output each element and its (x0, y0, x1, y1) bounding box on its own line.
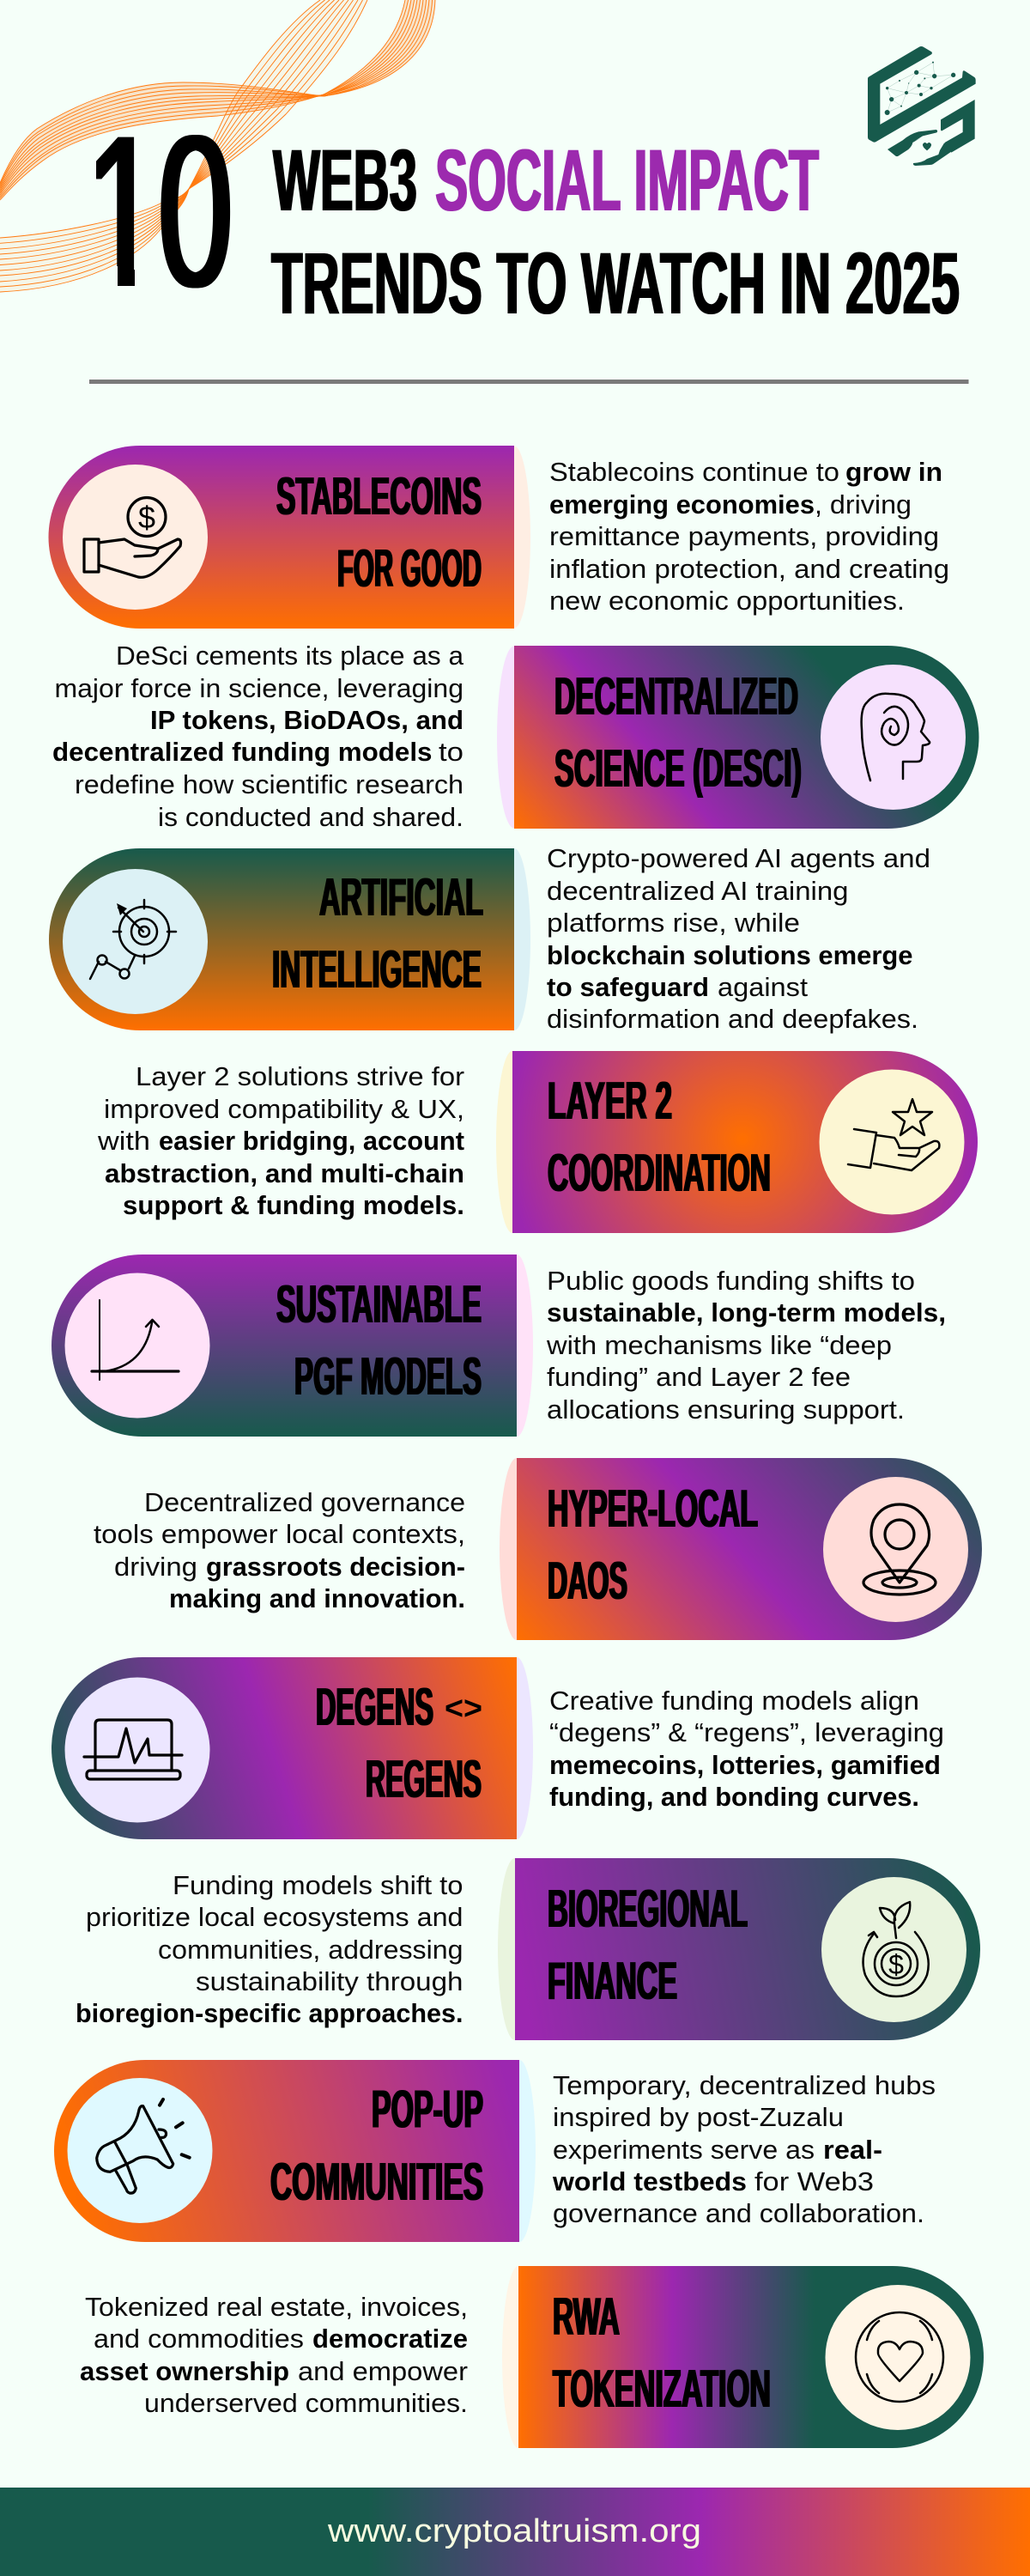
heading (548, 1479, 758, 1611)
text: decentralized science: major force in science, leveraging (55, 673, 464, 703)
text: pop-up communities: real- (823, 2135, 882, 2165)
big number 10: 1 (86, 91, 161, 332)
text: decentralized science: to (439, 737, 464, 767)
text: layer 2: improved compatibility & UX, (104, 1094, 464, 1124)
big number 10: 0 (158, 91, 233, 332)
heading: COMMUNITIES (270, 2153, 483, 2212)
text: bioregional finance: bioregion-specific approaches. (76, 1998, 464, 2028)
text: pop-up communities: Temporary, decentralized hubs (553, 2070, 936, 2100)
text: stablecoins: inflation protection, and creating (549, 554, 949, 584)
text: pop-up communities: inspired by post-Zuzalu (553, 2102, 844, 2132)
heading (276, 467, 482, 598)
heading (270, 2080, 483, 2212)
heading: REGENS (366, 1750, 482, 1809)
text: layer 2: abstraction, and multi-chain (105, 1158, 464, 1188)
text: decentralized science: is conducted and shared. (158, 802, 464, 832)
heading: SUSTAINABLE (276, 1275, 482, 1334)
text: decentralized science: DeSci cements its place as a (116, 641, 464, 671)
text: stablecoins: emerging economies (549, 489, 815, 519)
text: bioregional finance: sustainability through (196, 1966, 464, 1996)
text: rwa tokenization (80, 2292, 468, 2418)
heading: POP-UP (372, 2080, 483, 2140)
text: bioregional finance: Funding models shift to (173, 1870, 464, 1900)
icon: hand holding coin: $ (138, 500, 155, 535)
text: sustainable pgf (546, 1266, 946, 1425)
text: artificial intelligence: platforms rise, while (547, 908, 800, 938)
heading (276, 1275, 482, 1406)
icon: plant and coin: $ (888, 1949, 904, 1980)
text: hyper-local daos: driving (114, 1552, 197, 1582)
text: artificial intelligence: disinformation and deepfakes. (547, 1004, 918, 1034)
text: rwa tokenization: and empower (298, 2356, 468, 2386)
text: hyper-local daos: Decentralized governance (144, 1487, 465, 1517)
heading: LAYER 2 (548, 1072, 672, 1131)
text: sustainable pgf: Public goods funding shifts to (547, 1266, 915, 1296)
heading (548, 1072, 771, 1203)
text: artificial intelligence: against (718, 972, 808, 1002)
heading: DEGENS (316, 1678, 433, 1737)
text: hyper-local daos (94, 1487, 465, 1613)
panel: pop-up communities (54, 2060, 536, 2242)
panel: layer 2 coordination (496, 1051, 978, 1233)
panel: degens regens (52, 1657, 533, 1839)
text: sustainable pgf: funding” and Layer 2 fee (547, 1362, 851, 1392)
heading: INTELLIGENCE (272, 940, 482, 999)
text: pop-up communities: for Web3 (754, 2166, 874, 2196)
icon: growth chart (65, 1273, 209, 1419)
text: degens regens: funding, and bonding curves. (549, 1782, 919, 1812)
heading: BIOREGIONAL (548, 1880, 748, 1939)
text: stablecoins: Stablecoins continue to (549, 457, 839, 487)
text: degens regens: memecoins, lotteries, gamified (549, 1750, 941, 1780)
text: stablecoins: new economic opportunities. (549, 586, 905, 616)
icon: plant and coin (821, 1877, 966, 2022)
text: pop-up communities: governance and collaboration. (553, 2198, 924, 2228)
text: degens regens: Creative funding models align (549, 1686, 919, 1716)
panel: decentralized science (497, 646, 978, 829)
panel: sustainable pgf models (52, 1255, 533, 1437)
heading line one (273, 131, 819, 229)
panel: stablecoins for good (49, 446, 530, 629)
text: artificial intelligence (547, 843, 930, 1034)
text: sustainable pgf: sustainable, long-term models, (547, 1297, 946, 1327)
icon: target with arrow (63, 869, 208, 1014)
icon: map pin (823, 1477, 968, 1622)
text: layer 2 (97, 1061, 464, 1220)
text: layer 2: easier bridging, account (159, 1126, 464, 1156)
text: rwa tokenization: and commodities (94, 2324, 304, 2354)
heading (554, 667, 802, 799)
heading (548, 1880, 748, 2011)
text: pop-up communities: experiments serve as (553, 2135, 815, 2165)
icon: megaphone (67, 2078, 213, 2223)
icon: head with spiral (821, 665, 966, 810)
text: layer 2: support & funding models. (123, 1190, 464, 1220)
text: rwa tokenization: Tokenized real estate, invoices, (85, 2292, 468, 2322)
text: pop-up communities (552, 2070, 936, 2228)
heading: <> (445, 1691, 482, 1727)
text: artificial intelligence: Crypto-powered AI agents and (547, 843, 930, 873)
footer url: www.cryptoaltruism.org (327, 2513, 701, 2549)
heading (553, 2287, 771, 2419)
text: rwa tokenization: democratize (312, 2324, 468, 2354)
text: hyper-local daos: grassroots decision- (206, 1552, 465, 1582)
panel: bioregional finance (498, 1858, 980, 2040)
text: degens regens (549, 1686, 944, 1812)
text: layer 2: Layer 2 solutions strive for (136, 1061, 464, 1091)
heading: STABLECOINS (276, 467, 482, 526)
icon: coin with heart (826, 2285, 970, 2430)
panel: artificial intelligence (49, 848, 530, 1030)
text: bioregional finance (76, 1870, 464, 2028)
text: decentralized science: decentralized funding models (52, 737, 433, 767)
text: stablecoins: grow in (845, 457, 942, 487)
panel: hyper-local daos (500, 1458, 982, 1640)
text: stablecoins (549, 457, 949, 616)
text: degens regens: “degens” & “regens”, leveraging (549, 1717, 944, 1747)
text: artificial intelligence: decentralized AI training (547, 876, 848, 906)
text: layer 2: with (97, 1126, 150, 1156)
text: decentralized science: redefine how scientific research (75, 769, 464, 799)
text: bioregional finance: prioritize local ecosystems and (86, 1902, 464, 1932)
text: sustainable pgf: with mechanisms like “deep (546, 1330, 892, 1360)
heading (272, 868, 483, 999)
icon: laptop with pulse (65, 1678, 209, 1822)
heading: TOKENIZATION (553, 2360, 771, 2419)
text: stablecoins: , driving (815, 489, 912, 519)
text: decentralized science (52, 641, 464, 832)
heading: ARTIFICIAL (319, 868, 483, 927)
text: decentralized science: IP tokens, BioDAOs, and (150, 705, 464, 735)
footer bar (0, 2488, 1030, 2576)
text: pop-up communities: world testbeds (552, 2166, 747, 2196)
heading (316, 1678, 482, 1809)
text: artificial intelligence: blockchain solutions emerge (547, 940, 913, 970)
heading: RWA (553, 2287, 620, 2347)
icon: hand with star (819, 1070, 965, 1214)
text: hyper-local daos: making and innovation. (169, 1583, 465, 1613)
heading: DECENTRALIZED (554, 667, 798, 726)
panel: rwa tokenization (502, 2266, 984, 2448)
icon: hand holding coin (63, 465, 208, 610)
logo (868, 46, 976, 166)
text: artificial intelligence: to safeguard (547, 972, 709, 1002)
heading: FINANCE (548, 1952, 677, 2011)
text: sustainable pgf: allocations ensuring support. (547, 1394, 905, 1425)
text: rwa tokenization: asset ownership (80, 2356, 289, 2386)
title (96, 135, 960, 314)
text: bioregional finance: communities, addressing (158, 1935, 464, 1965)
heading: PGF MODELS (294, 1347, 482, 1406)
heading: HYPER-LOCAL (548, 1479, 758, 1539)
orange line ribbon decoration (0, 0, 435, 292)
heading: SCIENCE (DESCI) (554, 739, 802, 799)
text: hyper-local daos: tools empower local contexts, (94, 1519, 465, 1549)
big number 10 (96, 135, 230, 289)
text: stablecoins: remittance payments, providing (549, 521, 939, 551)
divider (89, 380, 968, 384)
text: rwa tokenization: underserved communities. (144, 2388, 468, 2418)
heading: DAOS (548, 1552, 627, 1611)
panel: stablecoins for good: FOR GOOD (337, 539, 482, 598)
heading line one: WEB3 (273, 131, 417, 229)
heading: COORDINATION (548, 1144, 771, 1203)
